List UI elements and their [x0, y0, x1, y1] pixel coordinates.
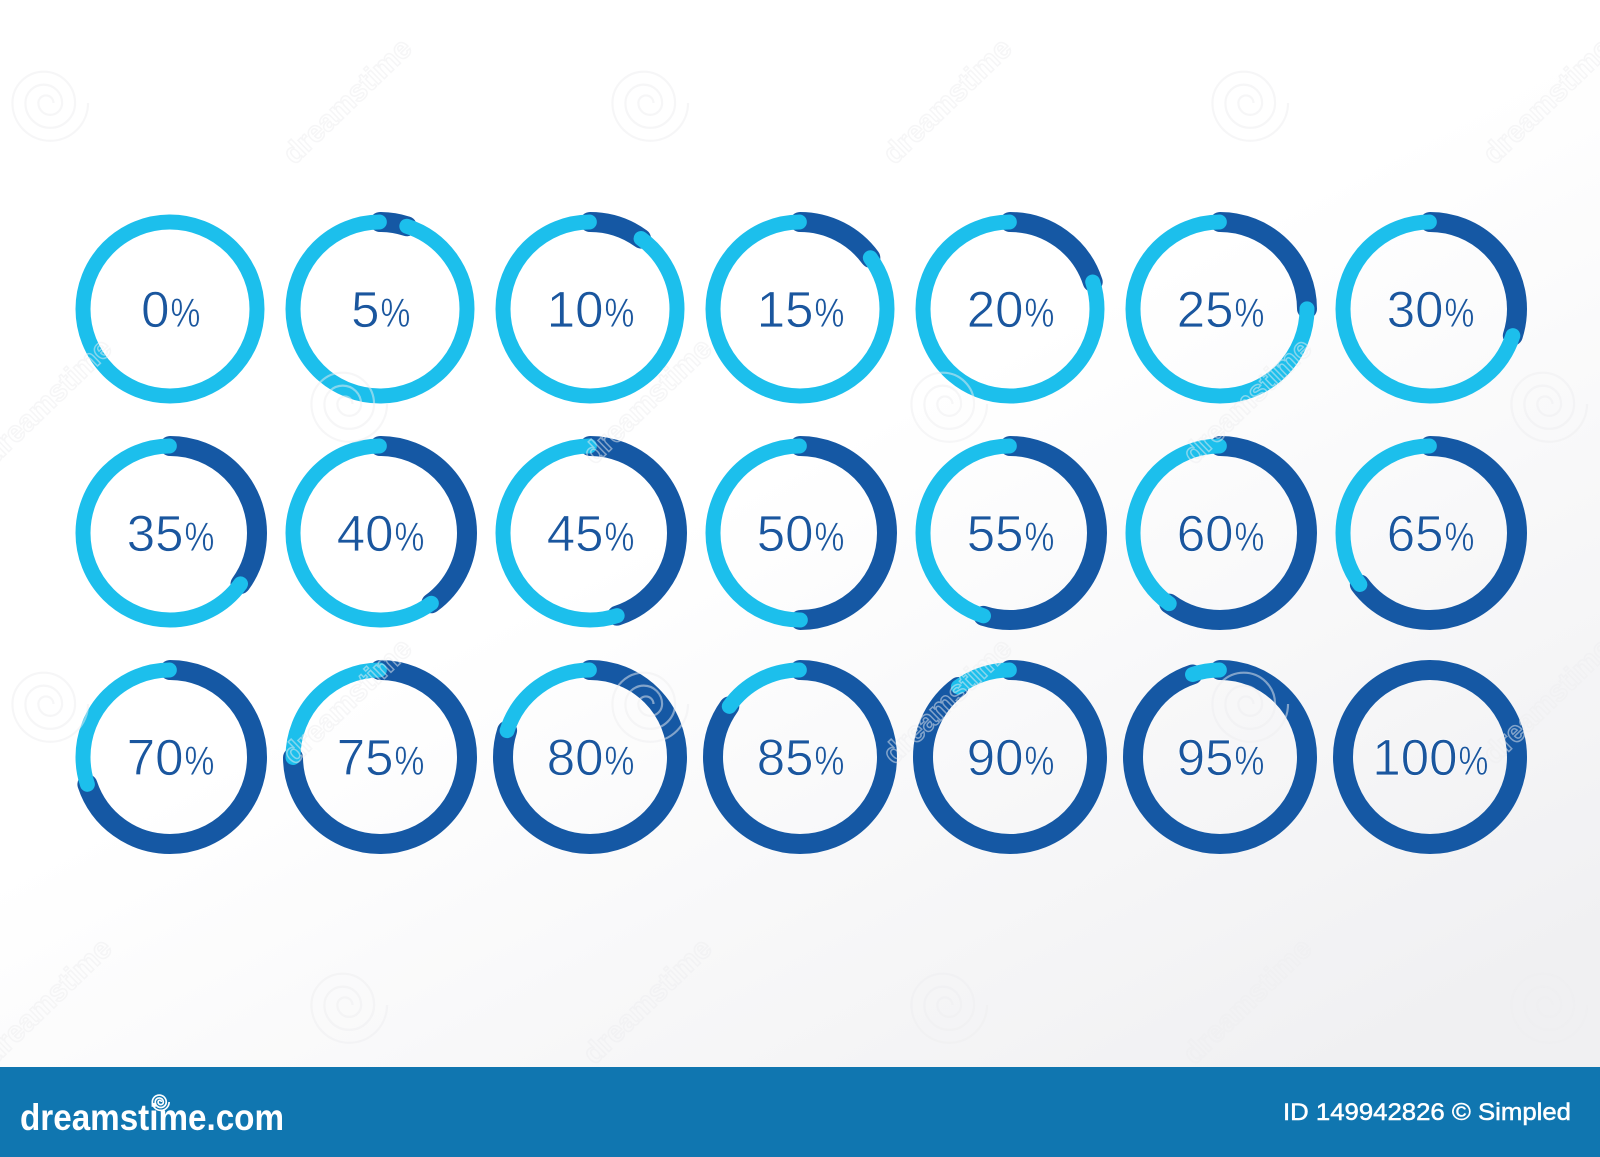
gauge 45% [503, 446, 677, 620]
gauge 5% [293, 222, 467, 396]
gauge 20%: 20 [967, 281, 1024, 338]
gauge 15% [713, 222, 887, 396]
gauge 90%: 90 [967, 729, 1024, 786]
gauge 80%: 80 [547, 729, 604, 786]
gauge 95% [1133, 670, 1307, 844]
watermark overlay: dreamstime [276, 632, 418, 771]
watermark overlay: dreamstime [276, 32, 418, 171]
gauge 100% [1343, 670, 1517, 844]
image id and credit: ID 149942826 © Simpled [1283, 1099, 1571, 1126]
gauge 35%: % [185, 514, 214, 560]
watermark overlay: dreamstime [576, 932, 718, 1071]
gauge 15%: 15 [757, 281, 814, 338]
gauge 55% [923, 446, 1097, 620]
gauge 25% [1133, 222, 1307, 396]
gauge 70% [83, 670, 257, 844]
gauge 50%: 50 [757, 505, 814, 562]
gauge 95%: % [1235, 738, 1264, 784]
gauge 85% [713, 670, 887, 844]
gauge 50%: % [815, 514, 844, 560]
gauge 70%: 70 [127, 729, 184, 786]
gauge 5%: % [380, 290, 410, 336]
gauge 65%: % [1445, 514, 1474, 560]
gauge 85%: % [815, 738, 844, 784]
gauge 20% [923, 222, 1097, 396]
gauge 75% [293, 670, 467, 844]
gauge 45%: 45 [547, 505, 604, 562]
gauge 65% [1343, 446, 1517, 620]
gauge 0%: % [170, 290, 200, 336]
gauge 75%: 75 [337, 729, 394, 786]
gauge 25%: 25 [1177, 281, 1234, 338]
gauge 60% [1133, 446, 1307, 620]
gauge 25%: % [1235, 290, 1264, 336]
gauge 0% [83, 222, 257, 396]
watermark overlay: dreamstime [876, 632, 1018, 771]
gauge 60%: % [1235, 514, 1264, 560]
gauge 100%: % [1459, 738, 1488, 784]
gauge 20%: % [1025, 290, 1054, 336]
footer bar [0, 1067, 1600, 1157]
watermark overlay: dreamstime [1176, 332, 1318, 471]
gauge 95%: 95 [1177, 729, 1234, 786]
gauge 40%: 40 [337, 505, 394, 562]
gauge 5%: 5 [351, 281, 380, 338]
watermark overlay: dreamstime [576, 332, 718, 471]
gauge 80% [503, 670, 677, 844]
gauge 100%: 100 [1372, 729, 1458, 786]
gauge 55%: % [1025, 514, 1054, 560]
watermark overlay: dreamstime [876, 32, 1018, 171]
gauge 55%: 55 [967, 505, 1024, 562]
gauge 45%: % [605, 514, 634, 560]
watermark overlay: dreamstime [1176, 932, 1318, 1071]
gauge 90%: % [1025, 738, 1054, 784]
gauge 10%: 10 [547, 281, 604, 338]
gauge 30%: % [1445, 290, 1474, 336]
gauge 40% [293, 446, 467, 620]
gauge 15%: % [815, 290, 844, 336]
gauge 85%: 85 [757, 729, 814, 786]
gauge 40%: % [395, 514, 424, 560]
gauge 0%: 0 [141, 281, 170, 338]
gauge 10% [503, 222, 677, 396]
gauge 10%: % [605, 290, 634, 336]
gauge 60%: 60 [1177, 505, 1234, 562]
gauge 30%: 30 [1387, 281, 1444, 338]
gauge 75%: % [395, 738, 424, 784]
gauge 90% [923, 670, 1097, 844]
gauge 30% [1343, 222, 1517, 396]
gauge 35%: 35 [127, 505, 184, 562]
gauge 50% [713, 446, 887, 620]
gauge 70%: % [185, 738, 214, 784]
gauge 80%: % [605, 738, 634, 784]
brand logo text: dreamstime.com [20, 1097, 284, 1138]
gauge 35% [83, 446, 257, 620]
gauge 65%: 65 [1387, 505, 1444, 562]
icon: spiral [152, 1095, 169, 1110]
